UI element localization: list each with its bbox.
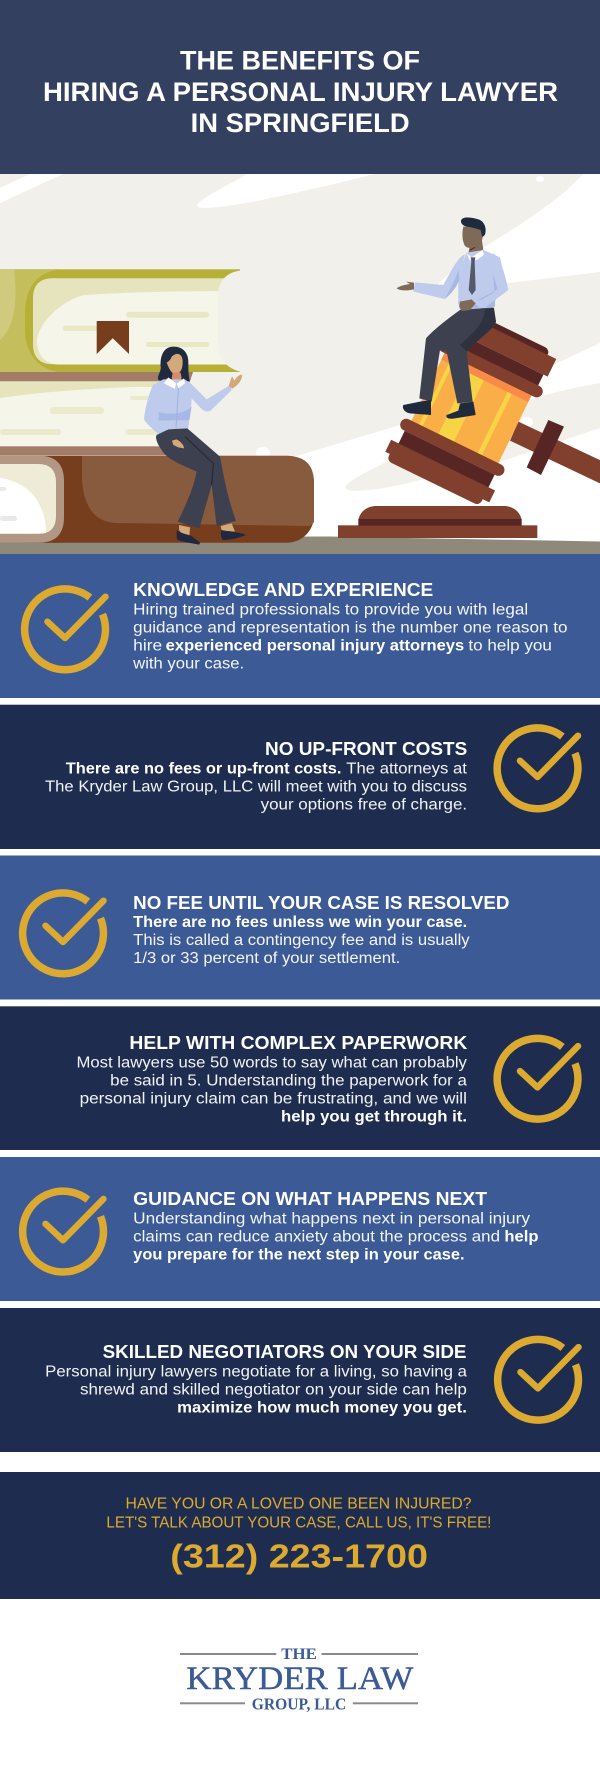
body text: guidance and representation is the number one reason to xyxy=(133,619,567,636)
body text: shrewd and skilled negotiator on your side can help xyxy=(80,1381,467,1398)
icon: check mark xyxy=(23,893,103,974)
logo: The Kryder Law Group, LLC: KRYDER LAW xyxy=(186,1661,414,1697)
icon: check mark xyxy=(498,1339,578,1420)
man sitting on gavel xyxy=(397,217,508,419)
heading: KNOWLEDGE AND EXPERIENCE xyxy=(133,580,433,600)
panel: knowledge and experience xyxy=(0,554,600,698)
panel: guidance on what happens next xyxy=(0,1157,600,1301)
heading: NO FEE UNTIL YOUR CASE IS RESOLVED xyxy=(133,893,509,913)
stack of books xyxy=(0,268,314,543)
body text: Most lawyers use 50 words to say what can probably xyxy=(76,1054,467,1071)
panel: no up-front costs xyxy=(0,705,600,849)
icon: check mark xyxy=(23,1191,103,1272)
body text xyxy=(45,760,468,813)
logo: The Kryder Law Group, LLC: THE xyxy=(281,1646,317,1663)
body text: Understanding what happens next in personal injury xyxy=(133,1210,530,1227)
body text: personal injury claim can be frustrating, and we will xyxy=(80,1090,467,1107)
title: THE BENEFITS OF xyxy=(180,46,420,76)
heading: HELP WITH COMPLEX PAPERWORK xyxy=(129,1033,467,1053)
body text xyxy=(133,1210,538,1263)
body text: This is called a contingency fee and is usually xyxy=(133,932,470,949)
body text: experienced personal injury attorneys xyxy=(166,637,464,654)
title: IN SPRINGFIELD xyxy=(191,108,410,138)
body text xyxy=(133,914,470,967)
call to action text: LET'S TALK ABOUT YOUR CASE, CALL US, IT'S FREE! xyxy=(106,1514,491,1531)
icon: bookmark xyxy=(97,321,129,354)
body text xyxy=(132,601,568,672)
heading: NO UP-FRONT COSTS xyxy=(265,739,467,759)
panel: call to action xyxy=(0,1472,600,1599)
heading: SKILLED NEGOTIATORS ON YOUR SIDE xyxy=(103,1342,466,1362)
title xyxy=(43,46,558,138)
icon: check mark xyxy=(497,1038,578,1119)
body text xyxy=(45,1363,467,1416)
body text: with your case. xyxy=(132,655,244,672)
woman sitting on books xyxy=(144,347,246,545)
title: HIRING A PERSONAL INJURY LAWYER xyxy=(43,77,558,107)
body text: claims can reduce anxiety about the process and xyxy=(133,1228,500,1245)
body text: help xyxy=(504,1228,538,1245)
call to action text: HAVE YOU OR A LOVED ONE BEEN INJURED? xyxy=(126,1495,472,1512)
phone number: (312) 223-1700 xyxy=(170,1537,428,1574)
heading: GUIDANCE ON WHAT HAPPENS NEXT xyxy=(133,1189,487,1209)
body text: maximize how much money you get. xyxy=(177,1399,467,1416)
body text: Personal injury lawyers negotiate for a living, so having a xyxy=(45,1363,467,1380)
body text: your options free of charge. xyxy=(261,796,467,813)
body text: There are no fees unless we win your case. xyxy=(133,914,467,931)
body text: help you get through it. xyxy=(281,1108,467,1125)
body text: The attorneys at xyxy=(346,760,468,777)
gavel xyxy=(338,304,600,538)
logo: The Kryder Law Group, LLC: GROUP, LLC xyxy=(252,1694,346,1713)
call to action text xyxy=(106,1495,491,1531)
icon: check mark xyxy=(25,589,105,670)
body text: The Kryder Law Group, LLC will meet with you to discuss xyxy=(45,778,467,795)
body text: There are no fees or up-front costs. xyxy=(66,760,341,777)
panel: no fee until your case is resolved xyxy=(0,856,600,1000)
body text: 1/3 or 33 percent of your settlement. xyxy=(133,950,400,967)
body text: hire xyxy=(133,637,162,654)
ground xyxy=(0,536,600,554)
panel: skilled negotiators on your side xyxy=(0,1308,600,1452)
panel: help with complex paperwork xyxy=(0,1006,600,1150)
body text xyxy=(76,1054,467,1125)
logo: The Kryder Law Group, LLC xyxy=(180,1646,418,1713)
body text: you prepare for the next step in your case. xyxy=(133,1246,465,1263)
icon: check mark xyxy=(497,728,578,809)
body text: to help you xyxy=(468,637,552,654)
illustration: lawyers with books and gavel xyxy=(0,174,600,554)
body text: Hiring trained professionals to provide you with legal xyxy=(133,601,528,618)
title banner xyxy=(0,0,600,174)
body text: be said in 5. Understanding the paperwork for a xyxy=(110,1072,467,1089)
